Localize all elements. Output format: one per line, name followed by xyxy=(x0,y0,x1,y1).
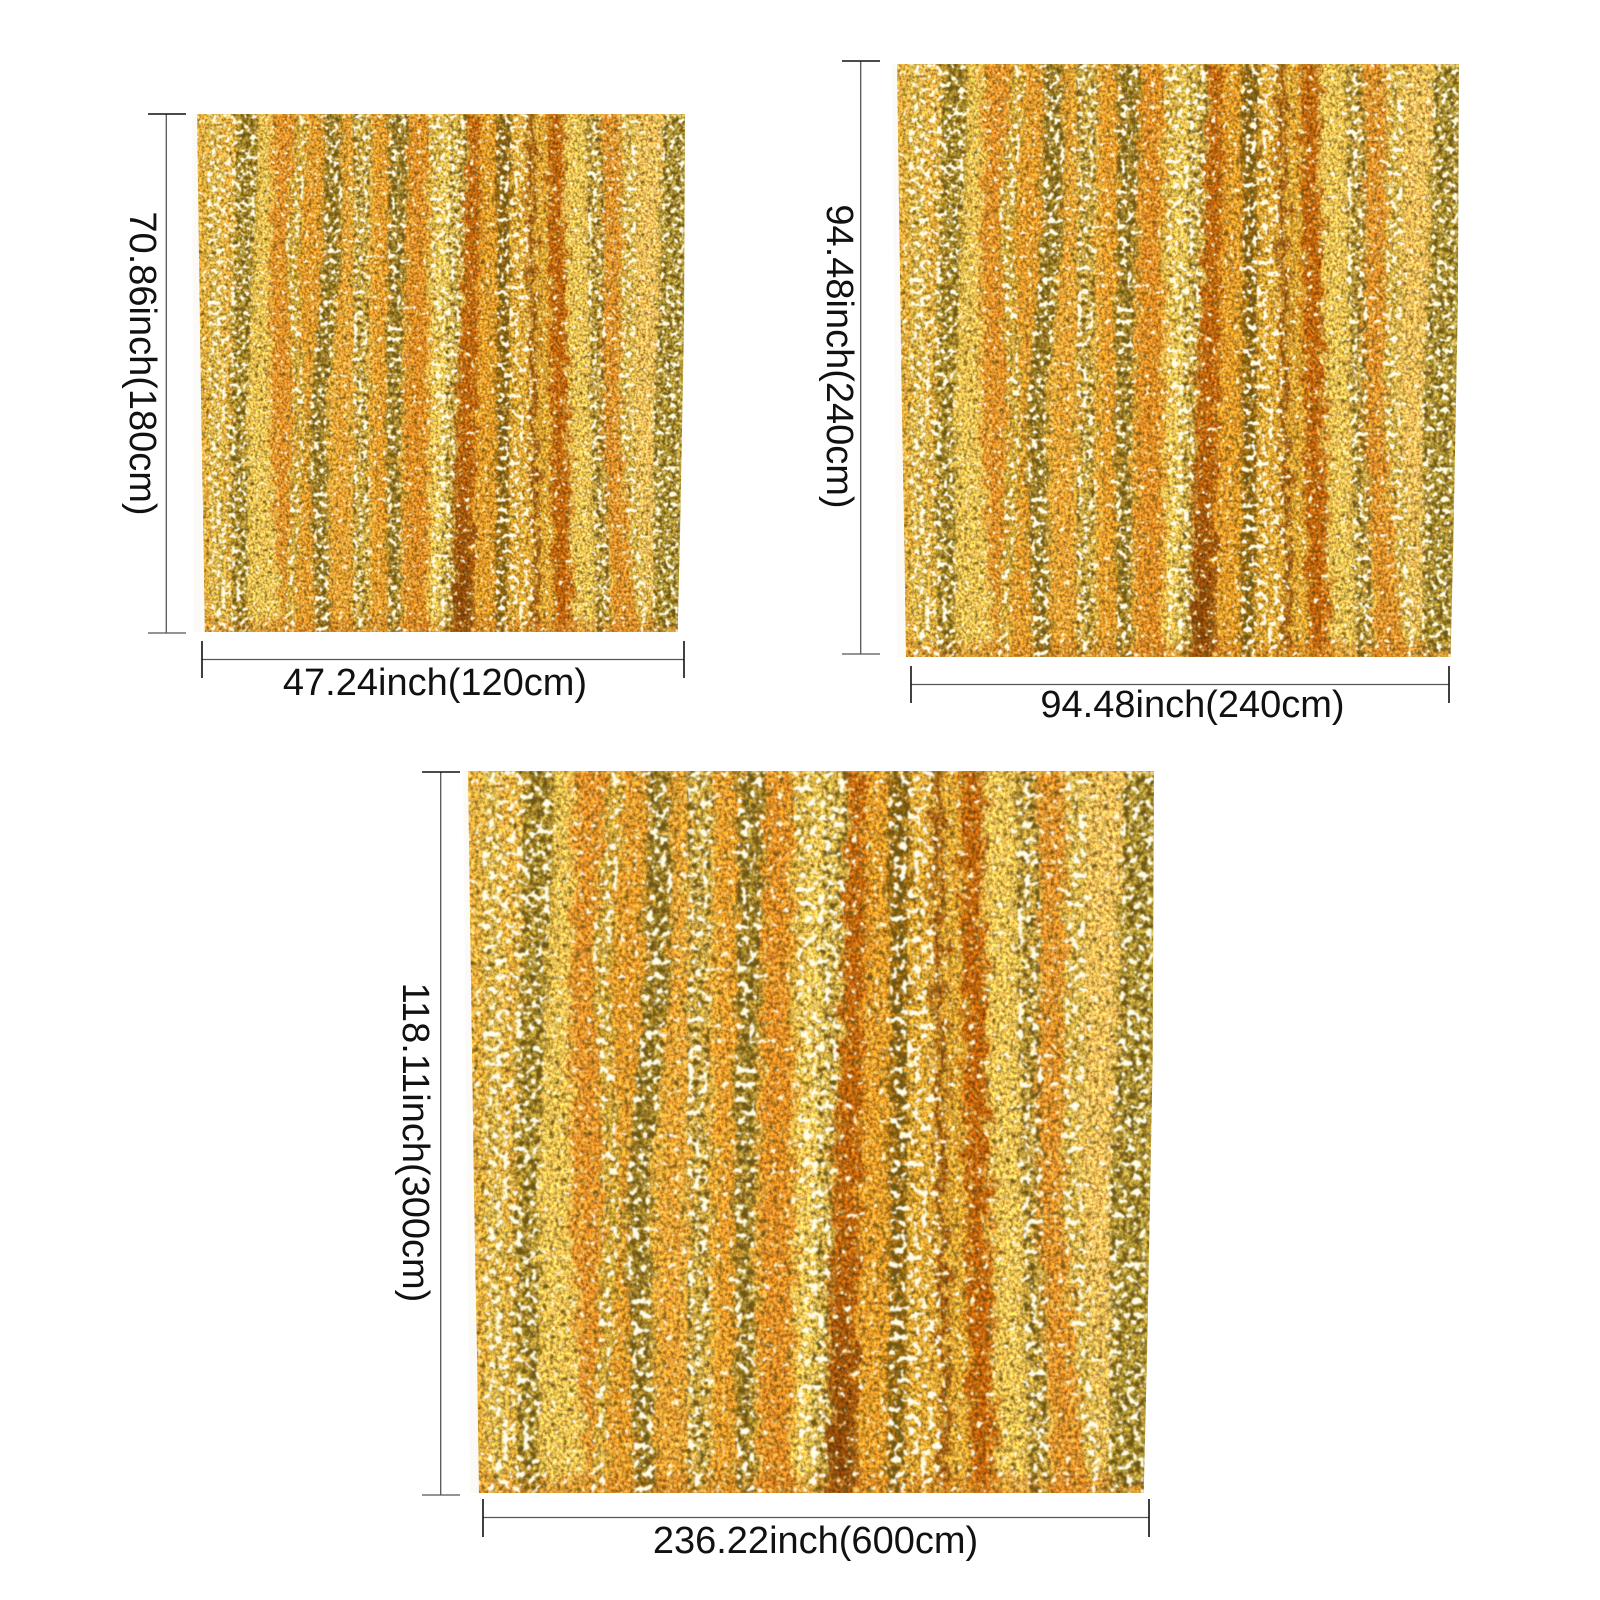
panel: small backdrop 120 x 180 cm xyxy=(121,88,709,704)
height dimension line xyxy=(148,114,186,633)
height label: 94.48inch(240cm) xyxy=(818,204,860,509)
panel: large backdrop 600 x 300 cm xyxy=(394,735,1188,1562)
image: gold sequin curtain medium xyxy=(869,34,1487,687)
height dimension line xyxy=(842,61,880,654)
width dimension line xyxy=(483,1499,1149,1537)
width dimension line xyxy=(202,641,684,678)
height label: 118.11inch(300cm) xyxy=(394,983,436,1302)
width label: 47.24inch(120cm) xyxy=(283,662,587,704)
panel: medium backdrop 240 x 240 cm xyxy=(818,34,1487,726)
image: gold sequin curtain small xyxy=(173,88,709,658)
width label: 236.22inch(600cm) xyxy=(653,1520,978,1562)
width dimension line xyxy=(911,666,1449,703)
height dimension line xyxy=(422,772,460,1495)
width label: 94.48inch(240cm) xyxy=(1040,684,1345,726)
image: gold sequin curtain large xyxy=(434,735,1188,1529)
height label: 70.86inch(180cm) xyxy=(121,211,163,516)
